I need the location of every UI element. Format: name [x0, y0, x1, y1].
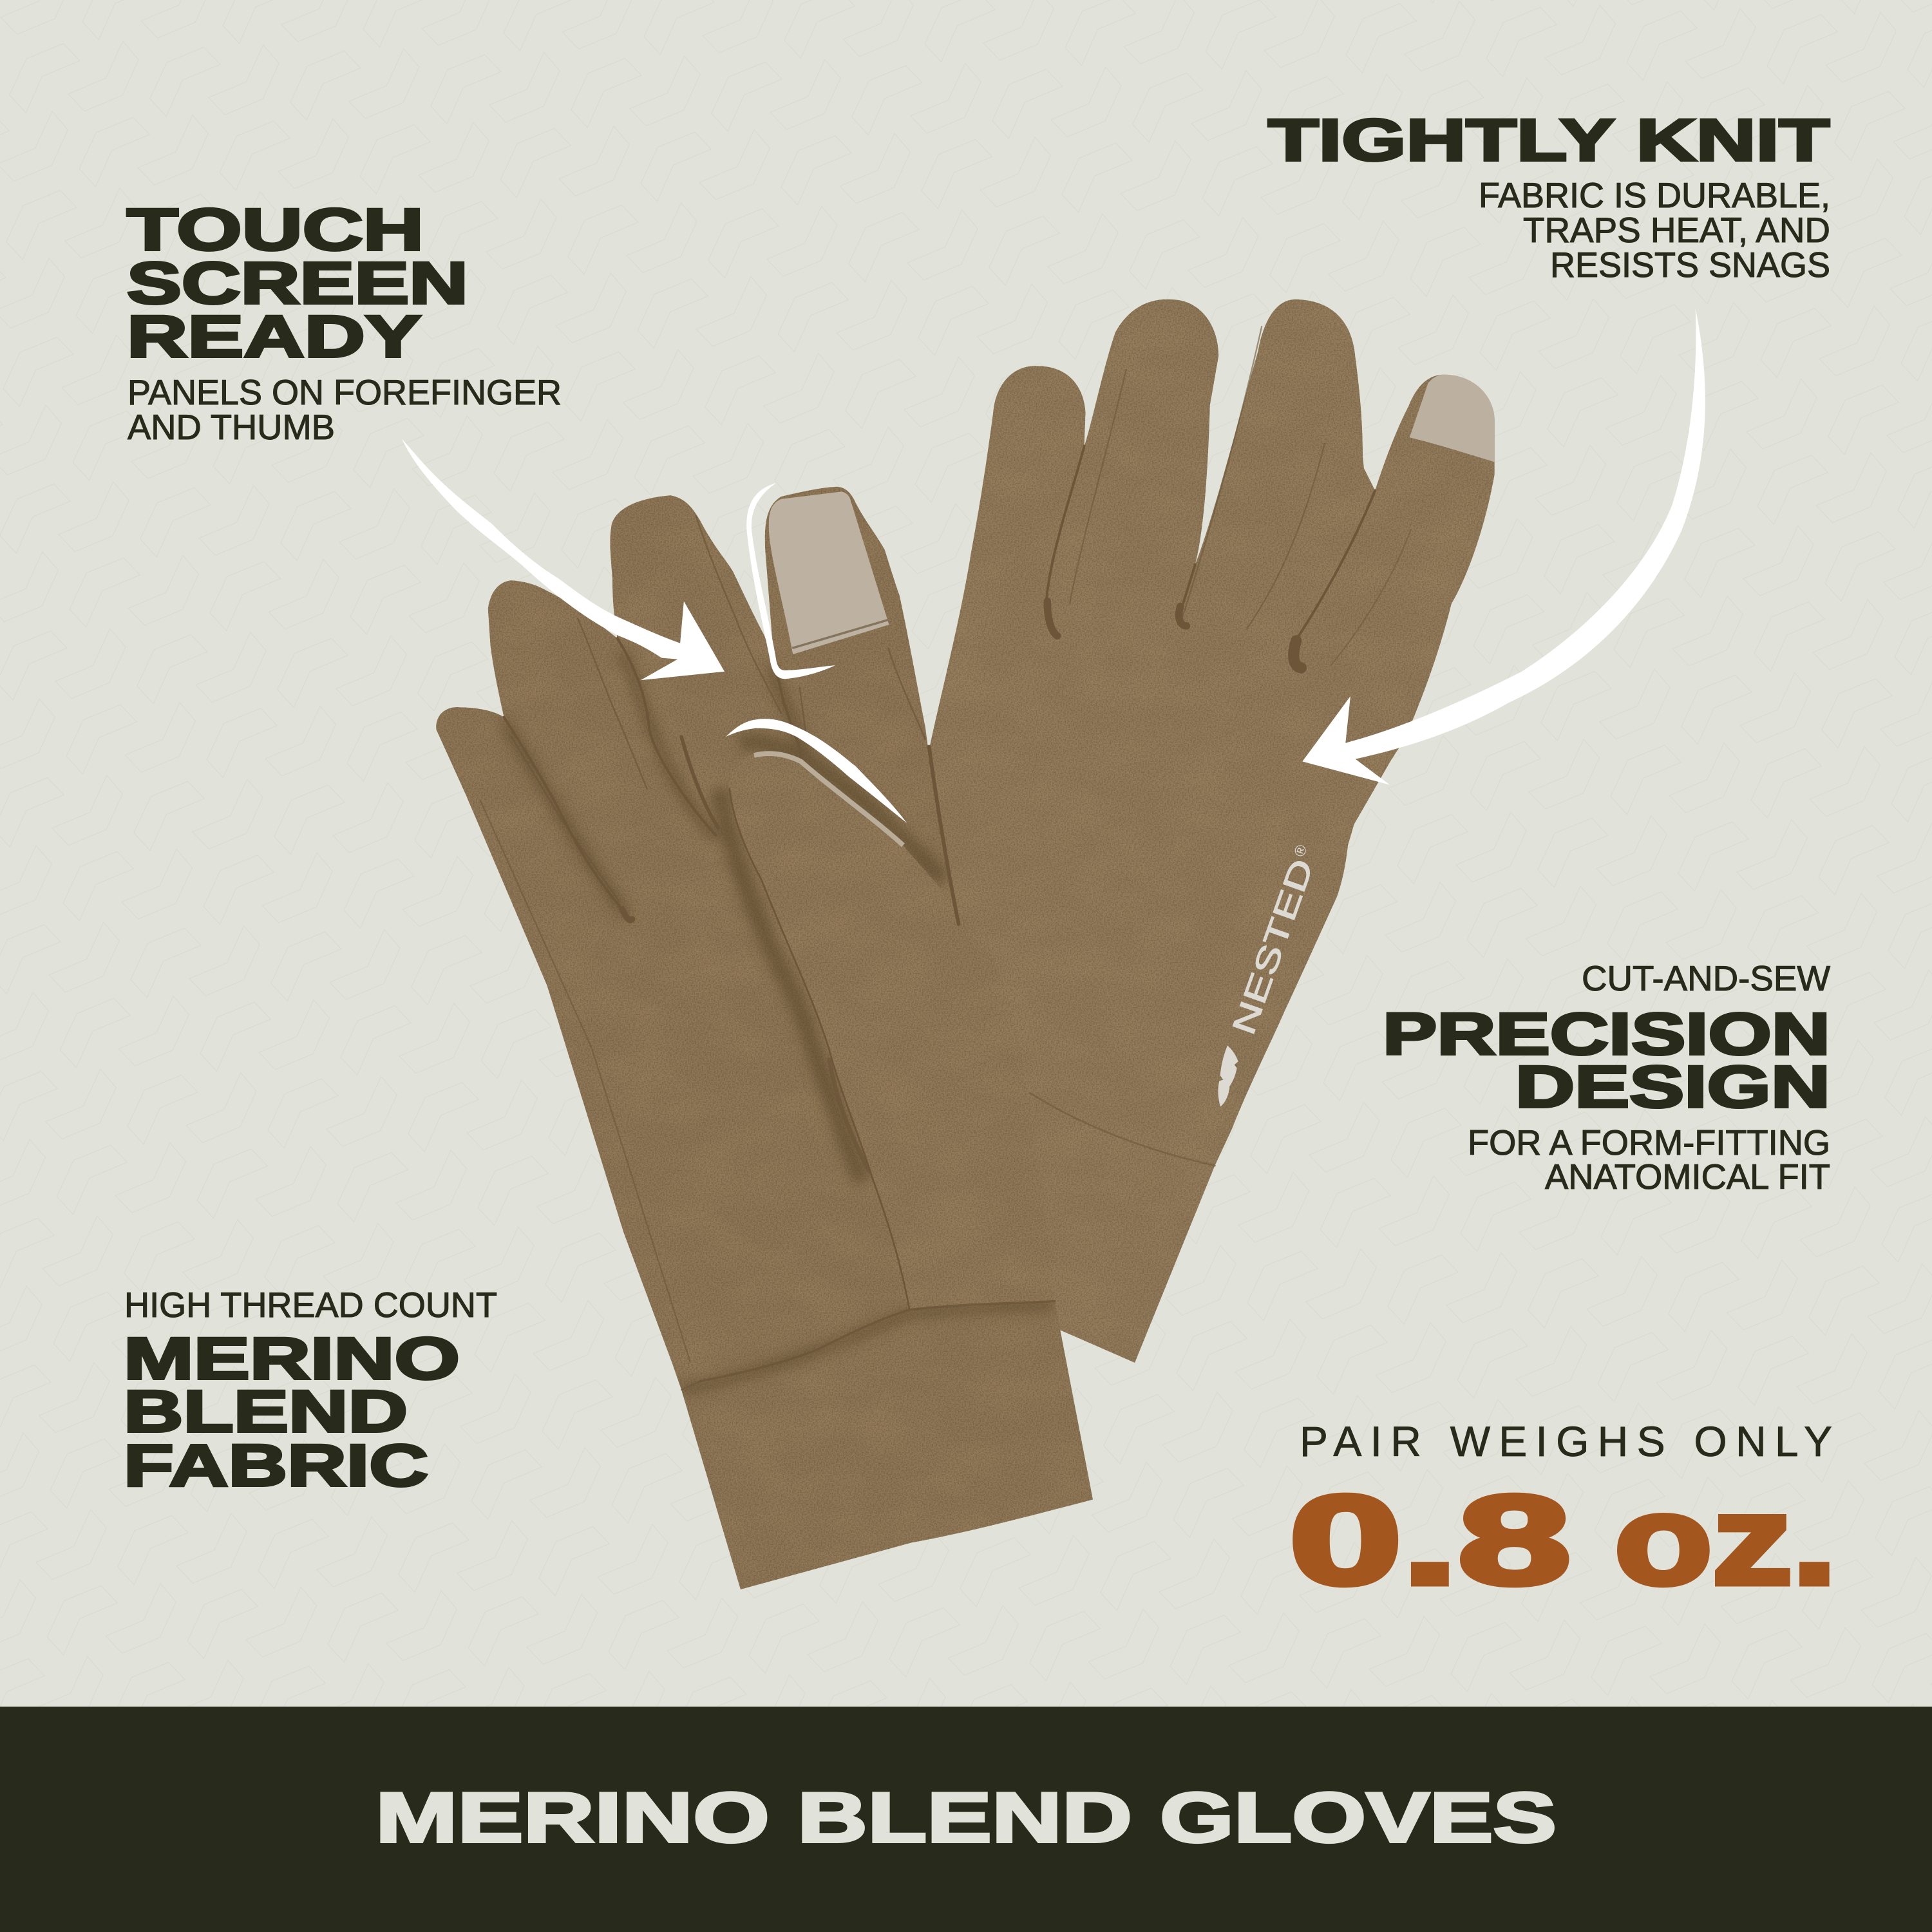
logo feather — [1218, 1045, 1238, 1106]
footer title: MERINO — [375, 1778, 770, 1857]
footer title: GLOVES — [1160, 1778, 1557, 1857]
right glove seams and finger slits — [1030, 327, 1411, 1166]
arrow: thumb curve — [726, 719, 907, 823]
heading — [127, 197, 468, 370]
heading: READY — [127, 304, 421, 370]
callout: weight — [1289, 1417, 1837, 1611]
description — [1468, 1122, 1830, 1197]
logo wordmark: NESTED — [1226, 854, 1321, 1039]
arrow: forefinger curve — [746, 483, 835, 679]
left glove (palm view) — [436, 487, 1093, 1589]
eyebrow: HIGH THREAD COUNT — [124, 1285, 497, 1325]
weight value — [1289, 1470, 1837, 1611]
heading: DESIGN — [1515, 1054, 1830, 1120]
logo: nested — [1218, 842, 1321, 1106]
heading: PRECISION — [1383, 1001, 1830, 1067]
gloves photo — [402, 299, 1705, 1589]
footer title: BLEND — [797, 1778, 1132, 1857]
heading: MERINO — [124, 1326, 460, 1392]
left forefinger touch panel — [769, 491, 889, 654]
description: RESISTS SNAGS — [1550, 245, 1830, 285]
description — [1479, 175, 1830, 285]
heading: SCREEN — [127, 251, 468, 316]
description: ANATOMICAL FIT — [1545, 1157, 1830, 1197]
heading: TOUCH — [127, 197, 424, 263]
left panel seam — [792, 620, 888, 648]
weight value: oz. — [1615, 1470, 1837, 1611]
logo registered mark: ® — [1291, 842, 1311, 859]
weight label: PAIR WEIGHS ONLY — [1300, 1417, 1832, 1465]
callout: precision design — [1383, 958, 1830, 1197]
description: PANELS ON FOREFINGER — [128, 372, 562, 412]
footer band — [0, 1707, 1932, 1932]
description: FABRIC IS DURABLE, — [1479, 175, 1830, 215]
callout: tightly knit — [1268, 108, 1830, 285]
heading — [124, 1326, 460, 1499]
heading: TIGHTLY KNIT — [1268, 108, 1830, 173]
heading: FABRIC — [124, 1433, 428, 1499]
footer title — [375, 1778, 1557, 1857]
arrow: tightly knit — [1302, 308, 1705, 785]
right glove touch panel — [1410, 375, 1495, 462]
description: TRAPS HEAT, AND — [1523, 210, 1830, 250]
description: FOR A FORM-FITTING — [1468, 1122, 1830, 1162]
arrow: touch screen — [402, 439, 724, 680]
heading — [1383, 1001, 1830, 1120]
left glove seams — [480, 516, 1055, 1390]
heading: BLEND — [124, 1379, 408, 1444]
callout: merino blend fabric — [124, 1285, 497, 1499]
right glove (back of hand) — [930, 299, 1495, 1363]
weight value: 0.8 — [1289, 1470, 1571, 1611]
left thumb — [729, 753, 1055, 1309]
left thumb touch panel strip — [754, 753, 903, 846]
callout: touch screen ready — [127, 197, 562, 447]
description — [128, 372, 562, 447]
eyebrow: CUT-AND-SEW — [1582, 958, 1830, 998]
description: AND THUMB — [128, 407, 335, 447]
left glove soft shading — [504, 653, 1055, 1390]
